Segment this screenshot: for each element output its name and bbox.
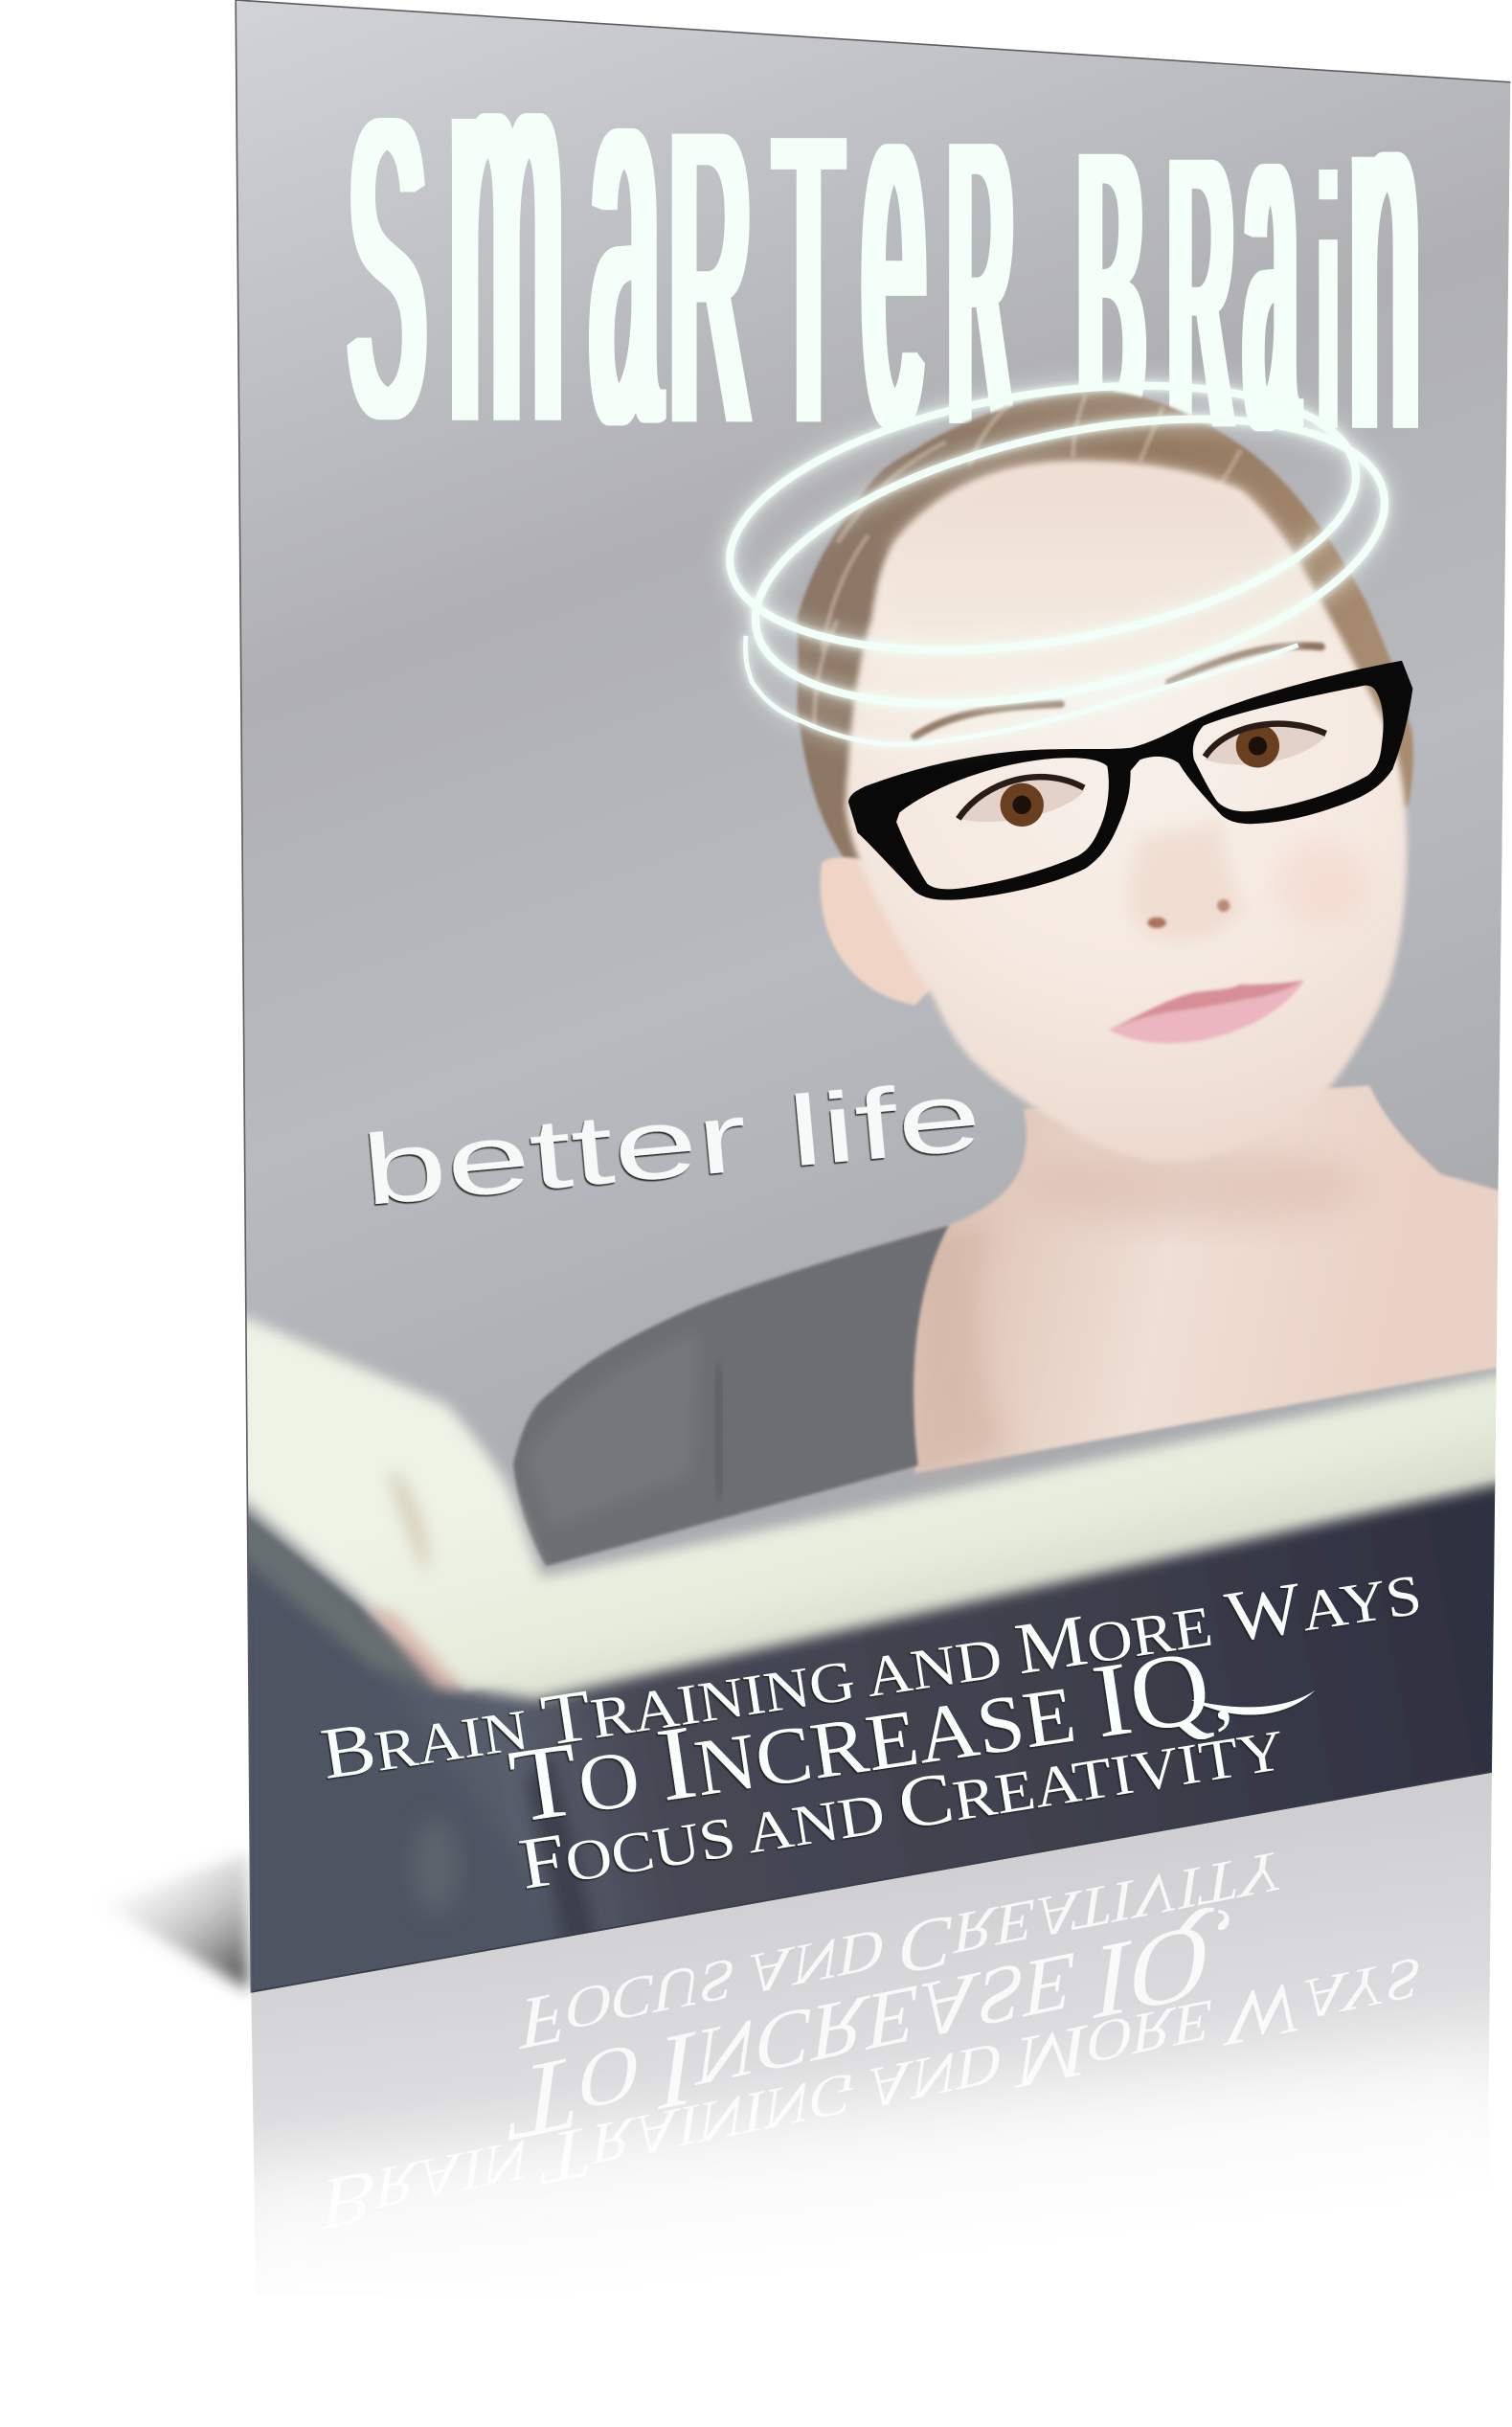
ear	[821, 857, 939, 1005]
title: S	[349, 31, 425, 507]
cover edge lines	[236, 0, 1510, 1993]
reflected subtitle: BRAIN TRAINING AND MORE WAYS	[316, 1940, 1426, 2248]
person	[513, 389, 1512, 1566]
reflected subtitle: TO INCREASE IQ,	[503, 1894, 1238, 2166]
hair	[797, 389, 1413, 861]
subtitle: FOCUS AND CREATIVITY	[514, 1705, 1290, 1905]
reflection	[233, 1664, 1504, 2415]
reflected subtitle	[316, 1664, 1426, 2415]
title: B	[1078, 70, 1144, 510]
book cover board	[233, 1473, 1512, 2016]
nose	[1129, 822, 1244, 941]
cover background	[237, 0, 1511, 1750]
cover shadow	[102, 1853, 248, 1989]
reflected subtitle: FOCUS AND CREATIVITY	[514, 1833, 1290, 2068]
book pages	[233, 1312, 1512, 1700]
eyes	[959, 724, 1326, 827]
lips	[1109, 980, 1304, 1043]
title: R	[670, 42, 751, 510]
book	[233, 1312, 1512, 2016]
shirt	[513, 1225, 949, 1566]
cover panel	[233, 0, 1512, 2016]
glasses	[848, 661, 1412, 900]
title: R	[1169, 76, 1232, 509]
title	[347, 113, 1418, 431]
title: R	[949, 56, 1013, 510]
face	[846, 463, 1407, 1160]
subtitle: TO INCREASE IQ,	[503, 1624, 1238, 1845]
cover bottom edge	[251, 1773, 1492, 1993]
glowing rings	[711, 346, 1410, 755]
neck and chest	[907, 1085, 1512, 1473]
eyebrows	[914, 646, 1321, 737]
Q swash	[1191, 1690, 1315, 1714]
title: T	[776, 49, 842, 510]
tagline: better life	[358, 1059, 985, 1226]
subtitle	[316, 1550, 1426, 1905]
subtitle: BRAIN TRAINING AND MORE WAYS	[316, 1550, 1426, 1795]
title: i	[1322, 105, 1334, 504]
